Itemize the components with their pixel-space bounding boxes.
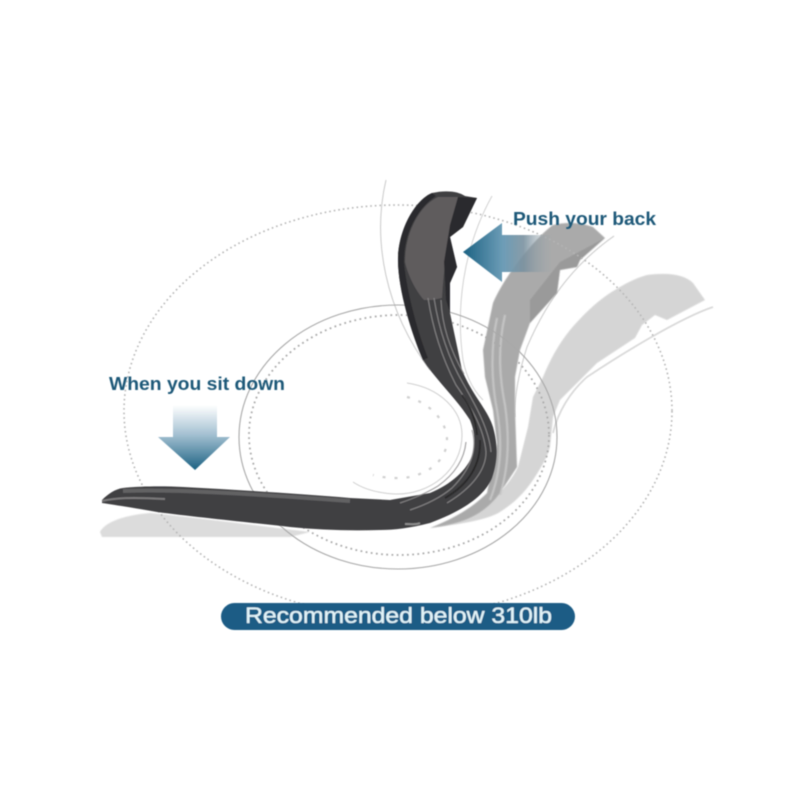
seat shadow (100, 513, 310, 537)
weight recommendation pill: Recommended below 310lb (245, 603, 552, 628)
arrow: push back (463, 223, 552, 282)
seat back: middle position (430, 223, 605, 528)
label: push your back: Push your back (513, 208, 657, 229)
guide circles (124, 205, 672, 617)
seat: dark front position (102, 191, 497, 530)
seat back: lightest position (430, 274, 705, 528)
label: when you sit down: When you sit down (109, 374, 285, 394)
arrow: sit down (158, 405, 230, 470)
guide arcs behind seats (381, 180, 713, 433)
